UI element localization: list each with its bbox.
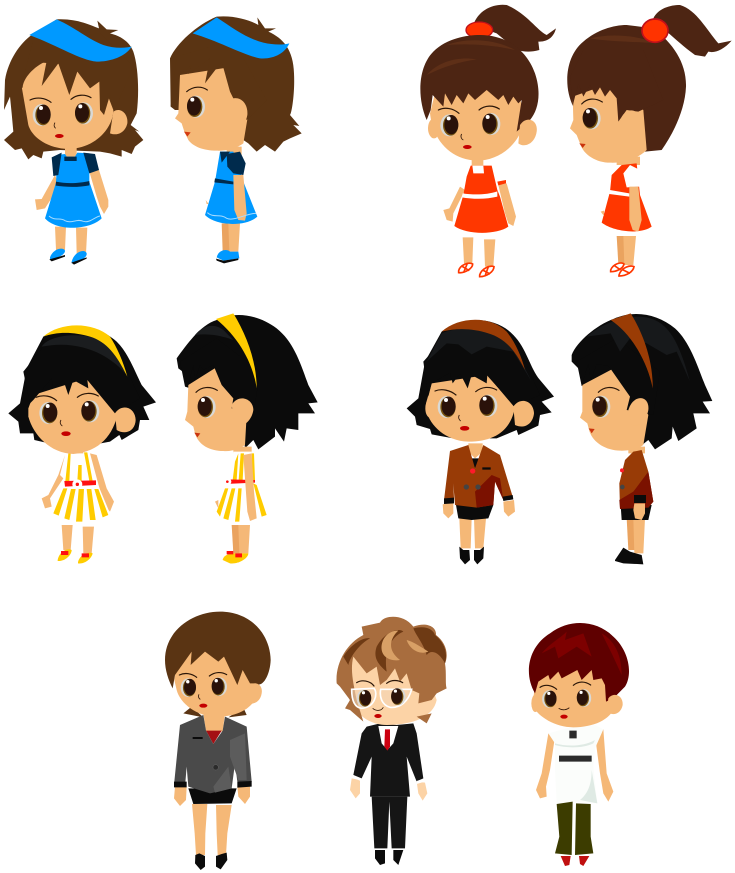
facial features: [357, 680, 406, 718]
glasses: [352, 688, 412, 708]
fringe: [577, 338, 660, 415]
fringe: [23, 338, 140, 413]
hair: [567, 25, 686, 152]
fringe: [570, 50, 663, 122]
hair tie: [642, 19, 668, 42]
face: [580, 365, 648, 451]
face: [533, 660, 615, 727]
facial features: [435, 387, 497, 431]
hair highlight: [427, 40, 515, 75]
character: man in black suit with glasses: [337, 617, 447, 865]
fringe: [20, 33, 133, 115]
hair back: [170, 16, 302, 152]
hair: [8, 327, 156, 447]
body: [35, 147, 108, 265]
body: [615, 447, 653, 564]
character: blue dress girl, front view: [4, 19, 143, 265]
hair band: [193, 17, 289, 58]
facial features: [184, 87, 207, 137]
hair: [572, 314, 712, 449]
body: [443, 158, 516, 277]
hair highlight: [542, 632, 622, 675]
ear: [245, 683, 262, 704]
hair sheen: [587, 317, 690, 382]
facial features: [438, 106, 500, 149]
ear: [230, 98, 247, 132]
face: [175, 67, 248, 151]
body: [42, 448, 114, 563]
character: brown jacket woman, side view: [572, 313, 712, 564]
body: [350, 723, 427, 865]
body: [205, 147, 257, 263]
left ear: [531, 695, 539, 712]
ear: [607, 695, 623, 714]
hair: [177, 315, 318, 449]
character: grey suit woman: [165, 612, 271, 870]
fringe: [180, 338, 260, 415]
hair band: [216, 313, 257, 388]
character: yellow dress girl, front view: [8, 325, 156, 563]
hair highlight: [381, 631, 428, 660]
character: red dress girl, front view: [420, 5, 556, 277]
hair sheen: [42, 335, 127, 375]
hair back: [4, 19, 143, 159]
character: brown jacket woman, front view: [407, 320, 554, 564]
hair band: [442, 320, 525, 370]
fringe: [171, 40, 267, 120]
ear: [628, 398, 648, 426]
fringe: [423, 332, 540, 407]
hair shading: [343, 627, 446, 672]
body: [174, 713, 252, 870]
character: red dress girl, side view: [567, 5, 732, 276]
hair: [420, 35, 539, 132]
ear: [110, 110, 127, 134]
face: [347, 643, 437, 725]
facial features: [540, 682, 591, 719]
ear: [232, 398, 253, 426]
hair: [165, 612, 271, 688]
facial features: [30, 95, 93, 138]
face: [22, 62, 113, 149]
face: [185, 365, 247, 451]
body: [443, 443, 515, 564]
hair: [529, 623, 629, 702]
facial features: [194, 388, 217, 437]
facial features: [579, 99, 602, 148]
hair: [337, 617, 447, 722]
ear: [620, 110, 639, 137]
hair: [407, 320, 554, 438]
character: yellow dress girl, side view: [177, 313, 318, 563]
hair sheen: [427, 329, 532, 382]
body: [215, 447, 267, 563]
face: [28, 378, 118, 454]
body: [536, 725, 613, 866]
face: [426, 375, 515, 442]
character: girl in white tunic with red hair: [529, 623, 629, 866]
ear: [513, 401, 534, 427]
back hair: [183, 707, 247, 717]
hair sheen: [195, 326, 233, 340]
hair band: [43, 325, 127, 377]
facial features: [179, 673, 227, 708]
ponytail: [473, 5, 556, 52]
hair tie: [466, 22, 493, 38]
hair band: [29, 19, 132, 62]
facial features: [589, 388, 619, 433]
left ear: [425, 399, 435, 418]
ponytail: [653, 5, 732, 57]
facial features: [36, 393, 99, 436]
face: [174, 640, 260, 717]
face: [430, 87, 525, 161]
body: [601, 157, 652, 276]
hair highlight: [573, 36, 657, 70]
neck tufts: [417, 713, 432, 723]
left ear: [428, 118, 440, 138]
ear: [115, 408, 136, 432]
character: blue dress girl, side view: [170, 16, 302, 263]
hair band: [611, 313, 653, 388]
face: [570, 83, 647, 163]
ear: [518, 120, 537, 145]
